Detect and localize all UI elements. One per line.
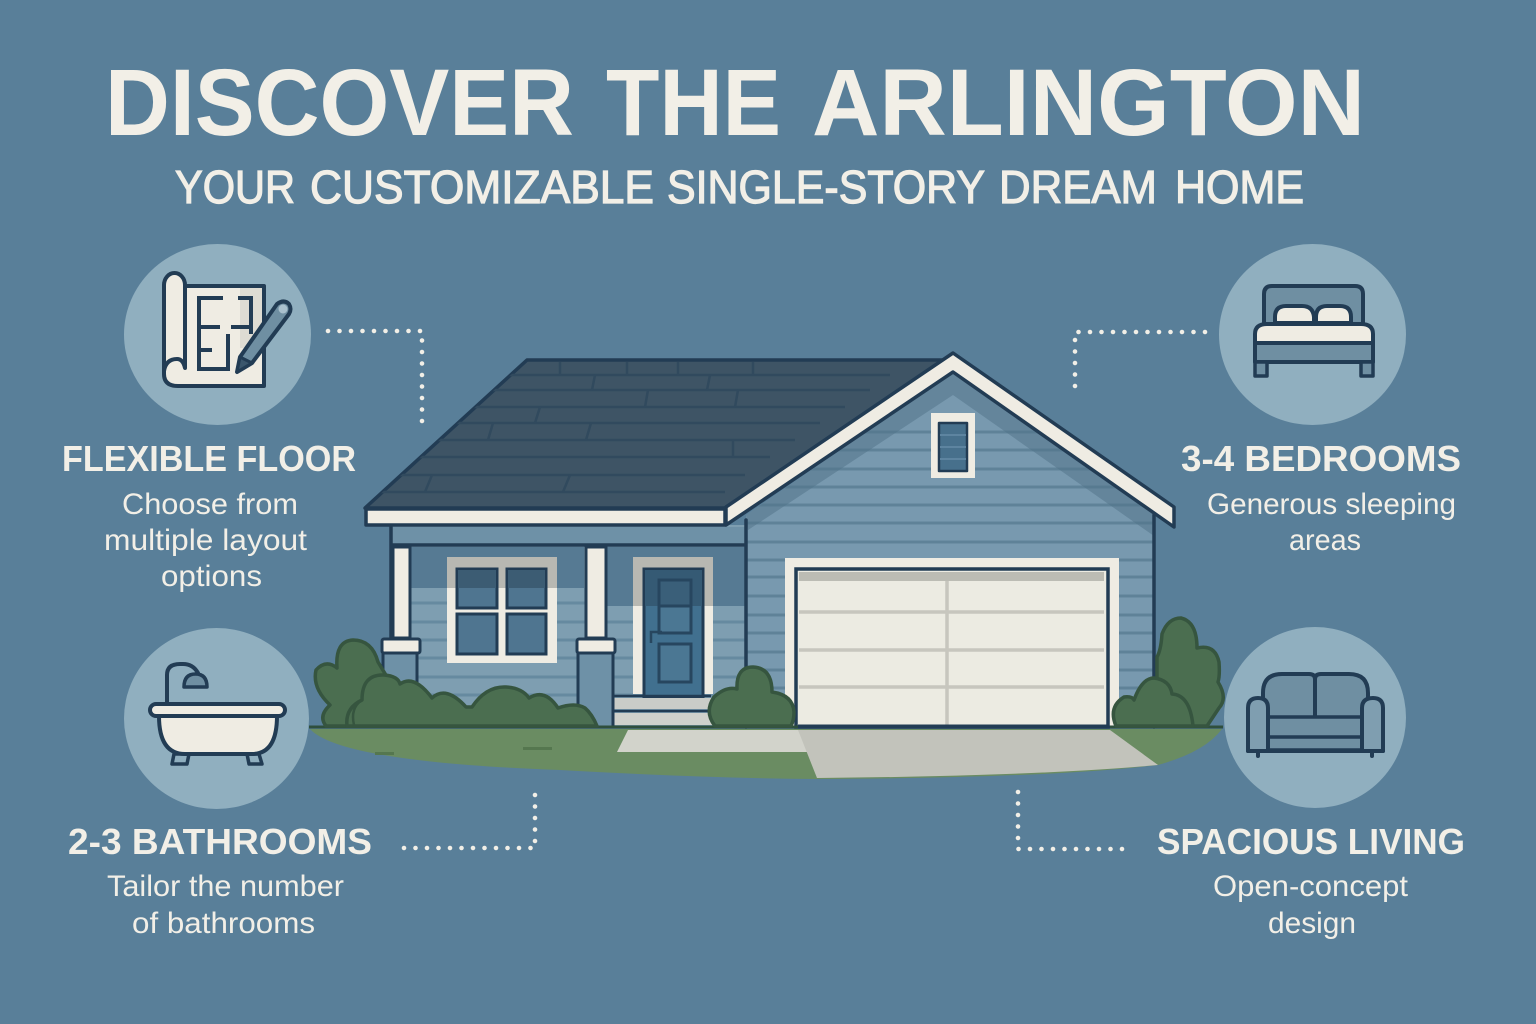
front door [633,557,713,697]
text: flexible floor description: options [161,560,262,593]
driveway [798,730,1158,778]
dotted connector: bedrooms [1075,332,1205,390]
porch columns [382,547,615,727]
title [105,50,1365,156]
title: THE [606,50,781,156]
gable trim [726,353,1174,527]
subtitle: YOUR [175,161,295,213]
porch window [447,557,557,663]
walkway [617,730,807,752]
porch wall [391,525,745,727]
panel: bathrooms [68,628,372,940]
heading: flexible floor: FLEXIBLE FLOOR [62,438,356,479]
title: ARLINGTON [812,50,1365,156]
title: DISCOVER [105,50,574,156]
subtitle: SINGLE-STORY [667,161,985,213]
lawn tufts [375,747,552,755]
icon: floor plan and pencil [124,244,311,425]
subtitle: HOME [1175,161,1304,213]
subtitle: CUSTOMIZABLE [310,161,654,213]
roof [360,360,950,508]
front steps [612,696,713,727]
text: bathrooms description: of bathrooms [132,907,315,940]
shrubs: left [315,640,597,726]
porch fascia [366,509,725,525]
text: bathrooms description [107,870,344,940]
panel: flexible floor [62,244,356,593]
illustration: house [309,353,1223,779]
panel: bedrooms [1181,244,1461,557]
text: flexible floor description: Choose from [122,488,298,521]
ground line [309,726,1223,728]
subtitle: DREAM [999,161,1157,213]
text: bedrooms description [1207,488,1456,557]
text: bathrooms description: Tailor the number [107,870,344,903]
heading: spacious living: SPACIOUS LIVING [1157,821,1465,862]
dotted connector: floor plan [328,331,422,426]
icon: bathtub [124,628,309,809]
dotted connector: living [1018,792,1127,849]
lawn [310,729,1222,779]
shrubs: right [1113,618,1223,726]
text: spacious living description: Open-concept [1213,870,1409,903]
text: bedrooms description: areas [1289,524,1361,557]
icon: sofa [1224,627,1406,808]
panel: spacious living [1157,627,1465,940]
text: flexible floor description [104,488,308,593]
text: spacious living description [1213,870,1409,940]
garage door [785,558,1119,728]
garage wall [746,372,1154,727]
heading: bathrooms: 2-3 BATHROOMS [68,821,372,862]
dotted connector: bathrooms [404,788,535,848]
text: flexible floor description: multiple layout [104,524,308,557]
heading: bedrooms: 3-4 BEDROOMS [1181,438,1461,479]
subtitle [175,161,1304,213]
shrub: center [709,667,794,726]
text: bedrooms description: Generous sleeping [1207,488,1456,521]
gable window [931,413,975,478]
icon: bed [1219,244,1406,425]
text: spacious living description: design [1268,907,1356,940]
